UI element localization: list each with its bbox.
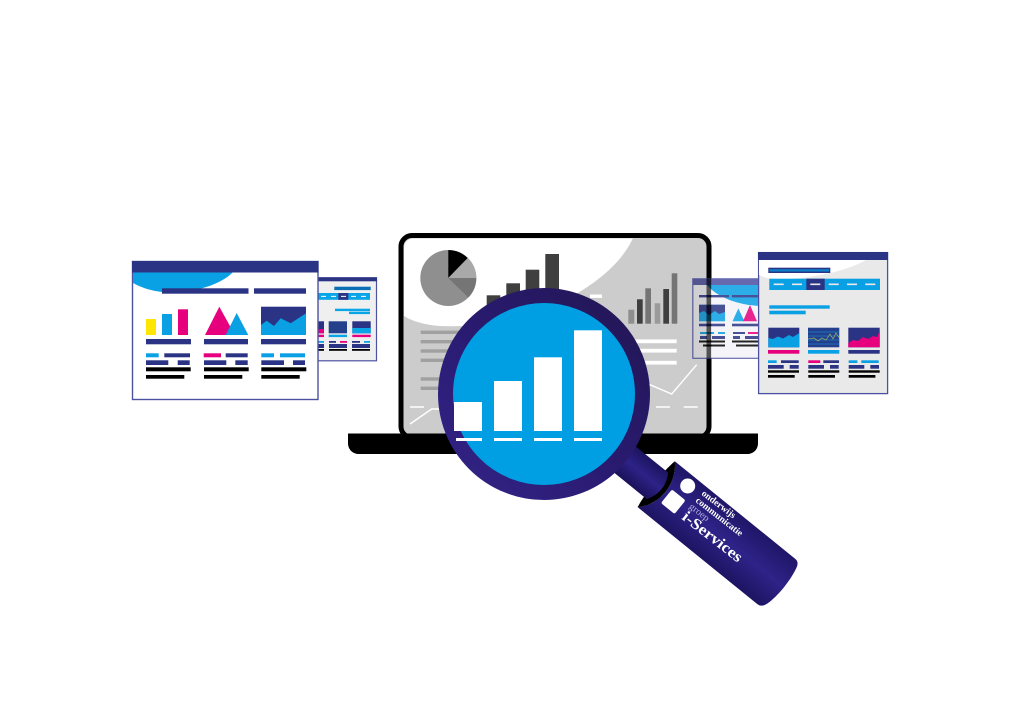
area chart blue [768,328,799,347]
navigation bar [769,279,880,290]
laptop base [348,434,758,454]
text lines on screen [421,294,677,390]
magnifier handle [600,430,802,610]
pie chart [420,250,476,306]
logo on handle: groep [687,502,711,524]
line chart [808,328,839,347]
magnifier ring [446,296,642,492]
large dashboard window right [758,252,888,394]
logo on handle: i-Services [679,508,746,566]
area chart [261,307,306,335]
laptop lid and screen [401,236,709,438]
logo on handle: onderwijs [699,489,737,521]
illustration: laptop, dashboards and magnifier [132,233,888,606]
small dashboard window behind left [300,277,377,361]
large dashboard window left [132,261,318,400]
logo on handle [661,478,746,566]
laptop [348,236,758,454]
magnifier [446,296,802,610]
area chart magenta [848,328,880,347]
dark bar chart [487,254,559,325]
magnified bars [454,330,602,441]
triangle chart [205,307,248,335]
bar chart [146,309,188,335]
grey bar chart [628,273,677,324]
small dashboard window right, translucent [692,278,764,358]
line chart on screen [410,365,698,424]
logo on handle: communicatie [693,496,744,539]
